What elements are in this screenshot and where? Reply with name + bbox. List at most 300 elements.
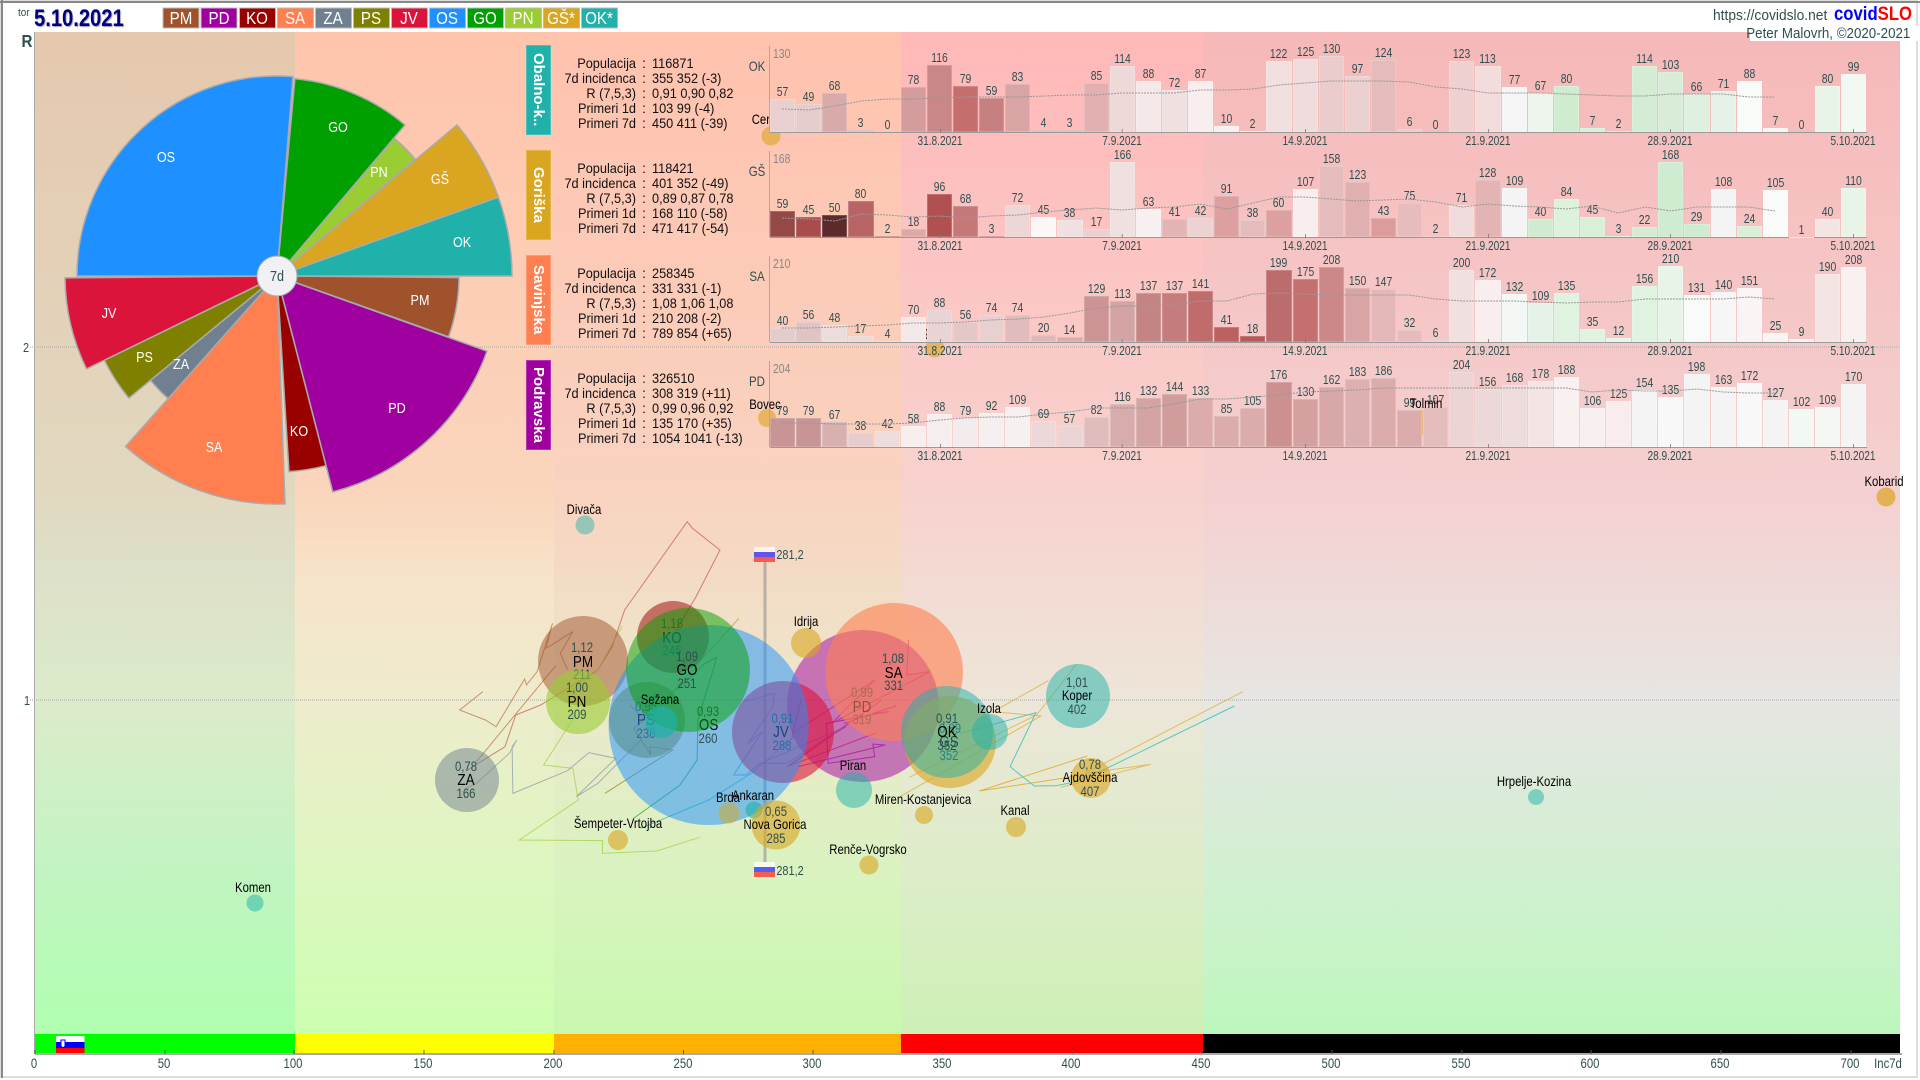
- bar chart: SA: 129: [1087, 281, 1105, 296]
- region bubbles: 166: [457, 786, 476, 801]
- region bubbles: 331: [884, 678, 903, 693]
- bar chart: GŠ: 3: [1616, 221, 1621, 236]
- bar chart: PD: 198: [1688, 359, 1706, 374]
- region plate: [526, 360, 551, 450]
- municipality bubbles: Hrpelje-Kozina: [1497, 774, 1571, 789]
- polar area chart of regions: OK: [453, 233, 472, 250]
- bar chart: OK: 87: [1195, 66, 1206, 81]
- bar chart: PD: 183: [1349, 364, 1366, 379]
- region statistics: :: [642, 54, 646, 70]
- bar chart: GŠ: 21.9.2021: [1465, 238, 1511, 253]
- region plate: Obalno-k..: [530, 53, 547, 127]
- bar chart: SA: 4: [884, 326, 890, 341]
- region statistics: 1054 1041 (-13): [652, 430, 743, 446]
- polar area chart of regions: KO: [290, 422, 308, 439]
- bar chart: GŠ: 158: [1322, 151, 1340, 166]
- bar chart: GŠ: 5.10.2021: [1830, 238, 1876, 253]
- municipality bubbles: Logatec: [910, 324, 950, 339]
- region statistics: :: [642, 280, 646, 296]
- bar chart: OK: 3: [1067, 115, 1073, 130]
- bar chart: PD: 133: [1192, 383, 1209, 398]
- bar chart: SA: 14.9.2021: [1282, 343, 1328, 358]
- bar chart: SA: 137: [1166, 278, 1183, 293]
- region statistics: [564, 160, 733, 236]
- bar chart: PD: 204: [773, 361, 790, 376]
- region bubbles: 319: [853, 712, 872, 727]
- bar chart: SA: 7.9.2021: [1102, 343, 1142, 358]
- bar chart: SA: 210: [773, 256, 790, 271]
- region bubbles: JV: [773, 724, 789, 741]
- bar chart: GŠ: 91: [1221, 181, 1232, 196]
- bar chart: GŠ: 45: [1587, 202, 1598, 217]
- bar chart: OK: 79: [960, 71, 971, 86]
- bar chart: OK: 2: [1616, 116, 1621, 131]
- bar chart: PD: 85: [1221, 401, 1232, 416]
- x axis: 450: [1192, 1056, 1211, 1071]
- x axis: 200: [544, 1056, 563, 1071]
- bar chart: GŠ: [749, 147, 1876, 253]
- municipality bubbles: 407: [1081, 784, 1100, 799]
- bar chart: OK: 5.10.2021: [1830, 133, 1876, 148]
- region bubbles: 0,99: [851, 685, 873, 700]
- bar chart: GŠ: 24: [1743, 211, 1755, 226]
- bar chart: GŠ: 60: [1273, 195, 1285, 210]
- region statistics: :: [642, 190, 646, 206]
- bar chart: GŠ: 96: [934, 179, 945, 194]
- region statistics: :: [642, 370, 646, 386]
- bar chart: SA: 48: [829, 310, 841, 325]
- region plate: Goriška: [530, 167, 547, 223]
- bar chart: SA: 6: [1433, 325, 1439, 340]
- region statistics: :: [642, 414, 646, 430]
- bar chart: GŠ: 40: [1534, 204, 1546, 219]
- bar chart: SA: 31.8.2021: [917, 343, 963, 358]
- bar chart: PD: 58: [907, 411, 919, 426]
- bar chart: OK: 123: [1453, 46, 1470, 61]
- region plate: Podravska: [530, 367, 547, 443]
- x axis: 0: [31, 1056, 37, 1071]
- site link and logo: [1713, 4, 1912, 25]
- bar chart: PD: 42: [881, 416, 893, 431]
- region bubbles: 352: [940, 748, 959, 763]
- bar chart: OK: 99: [1848, 59, 1859, 74]
- region statistics: Populacija: [577, 160, 636, 176]
- bar chart: SA: 17: [855, 321, 867, 336]
- region statistics: R (7,5,3): [586, 400, 636, 416]
- date heading: 5.10.2021: [34, 5, 124, 32]
- region statistics: 0,89 0,87 0,78: [652, 190, 733, 206]
- y axis labels: 2: [23, 340, 29, 355]
- polar area chart of regions: ZA: [173, 355, 190, 372]
- bar chart: OK: 88: [1143, 66, 1154, 81]
- region statistics: :: [642, 84, 646, 100]
- bar chart: OK: 68: [829, 78, 841, 92]
- region statistics: :: [642, 100, 646, 116]
- bar chart: SA: 135: [1558, 278, 1575, 293]
- municipality bubbles: 1,01: [1066, 675, 1088, 690]
- municipality bubbles: Kanal: [1001, 803, 1029, 818]
- region bubbles: [435, 601, 996, 825]
- bar chart: PD: PD: [749, 373, 765, 389]
- x axis: 300: [803, 1056, 822, 1071]
- bar chart: GŠ: 43: [1378, 203, 1389, 218]
- bar chart: GŠ: 59: [777, 196, 788, 211]
- bar chart: OK: 114: [1114, 51, 1130, 66]
- region bubbles: GO: [677, 662, 697, 679]
- bar chart: GŠ: 22: [1639, 212, 1650, 227]
- bar chart: SA: 140: [1714, 277, 1732, 292]
- bar chart: OK: 49: [803, 89, 814, 104]
- bar chart: OK: 57: [777, 84, 788, 99]
- bar chart: OK: 83: [1012, 69, 1023, 84]
- region bubbles: PS: [637, 712, 655, 729]
- region statistics: Populacija: [577, 370, 636, 386]
- bar chart: GŠ: 128: [1479, 165, 1497, 180]
- bar chart: OK: 130: [1322, 41, 1340, 56]
- region statistics: :: [642, 294, 646, 310]
- bar chart: SA: 150: [1349, 273, 1366, 288]
- bar chart: OK: 67: [1534, 78, 1546, 93]
- bar chart: OK: 0: [884, 117, 890, 132]
- bar chart: OK: 122: [1270, 46, 1288, 61]
- region legend chips: ZA: [323, 8, 344, 28]
- bar chart: SA: 113: [1114, 286, 1130, 301]
- region statistics: [564, 264, 733, 341]
- region statistics: 116871: [652, 54, 694, 70]
- region statistics: :: [642, 174, 646, 190]
- region statistics: :: [642, 220, 646, 236]
- municipality bubbles: Kobarid: [1864, 474, 1904, 489]
- bar chart: SA: 9: [1799, 324, 1804, 339]
- region statistics: 0,91 0,90 0,82: [652, 84, 733, 100]
- bar chart: OK: 77: [1508, 72, 1520, 87]
- bar chart: GŠ: 3: [989, 221, 994, 236]
- bar chart: GŠ: 63: [1143, 194, 1154, 209]
- bar chart: GŠ: 166: [1114, 147, 1131, 162]
- region statistics: 789 854 (+65): [652, 324, 732, 340]
- bar chart: SA: 199: [1270, 255, 1288, 270]
- bar chart: OK: 31.8.2021: [917, 133, 963, 148]
- bar chart: GŠ: 41: [1169, 204, 1180, 219]
- municipality bubbles: Divača: [567, 502, 601, 517]
- region statistics: 401 352 (-49): [652, 174, 728, 190]
- region statistics: 308 319 (+11): [652, 384, 731, 400]
- bar chart: GŠ: 17: [1090, 214, 1102, 229]
- region statistics: :: [642, 160, 646, 176]
- region statistics: Primeri 7d: [578, 114, 636, 130]
- icon: Slovenian flag on scale: [56, 1036, 84, 1054]
- bar chart: OK: 97: [1352, 61, 1363, 76]
- bar chart: SA: 28.9.2021: [1647, 343, 1693, 358]
- bar chart: OK: 103: [1662, 57, 1679, 72]
- region statistics: Primeri 7d: [578, 220, 636, 236]
- bar chart: PD: 88: [934, 399, 945, 414]
- bar chart: OK: 14.9.2021: [1282, 133, 1328, 148]
- bar chart: OK: [749, 41, 1876, 148]
- region statistics: :: [642, 384, 646, 400]
- bar chart: PD: 130: [1296, 384, 1314, 399]
- bar chart: OK: 6: [1407, 114, 1412, 129]
- x axis: 250: [674, 1056, 693, 1071]
- region legend chips: GŠ*: [547, 8, 575, 28]
- region statistics: 0,99 0,96 0,92: [652, 400, 733, 416]
- bar chart: OK: 124: [1375, 45, 1392, 60]
- bar chart: OK: 28.9.2021: [1647, 133, 1693, 148]
- bar chart: OK: 7.9.2021: [1102, 133, 1142, 148]
- region statistics: 258345: [652, 264, 695, 280]
- region plate: [526, 255, 551, 345]
- bar chart: SA: 137: [1140, 278, 1157, 293]
- municipality labels over charts: Tolmin: [1410, 396, 1442, 411]
- bar chart: SA: 35: [1587, 314, 1598, 329]
- y axis labels: [22, 31, 32, 708]
- bar chart: GŠ: 45: [1038, 202, 1050, 217]
- x axis: 550: [1452, 1056, 1471, 1071]
- bar chart: GŠ: 18: [907, 214, 919, 229]
- municipality bubbles: Koper: [1062, 688, 1092, 703]
- bar chart: GŠ: 38: [1247, 205, 1259, 220]
- bar chart: OK: 7: [1772, 113, 1778, 128]
- bar chart: SA: 208: [1845, 252, 1862, 267]
- bar chart: GŠ: 109: [1505, 173, 1523, 188]
- bar chart: SA: 208: [1322, 252, 1340, 267]
- y axis labels: 1: [24, 693, 30, 708]
- bar chart: SA: 40: [777, 313, 788, 328]
- bar chart: PD: 172: [1740, 368, 1758, 383]
- bar chart: PD: 69: [1038, 406, 1050, 421]
- region bubbles: 251: [678, 676, 697, 691]
- bar chart: GŠ: 2: [1433, 221, 1439, 236]
- bar chart: PD: 99: [1404, 395, 1415, 410]
- bar chart: SA: 132: [1505, 279, 1523, 294]
- bar chart: PD: 154: [1636, 375, 1653, 390]
- bar chart: SA: 70: [907, 302, 919, 317]
- bar chart: SA: 156: [1636, 271, 1653, 286]
- x axis: 50: [158, 1056, 170, 1071]
- bar chart: PD: 28.9.2021: [1647, 448, 1693, 463]
- site link and logo: covidSLO: [1834, 4, 1912, 25]
- bar chart: OK: 7: [1590, 113, 1595, 128]
- bar chart: PD: 204: [1453, 357, 1470, 372]
- bar chart: OK: 88: [1743, 66, 1755, 81]
- region statistics: 210 208 (-2): [652, 310, 721, 326]
- y axis labels: R: [22, 31, 32, 51]
- bar chart: PD: 170: [1845, 369, 1862, 384]
- municipality bubbles: Šempeter-Vrtojba: [574, 815, 662, 831]
- bar chart: GŠ: 123: [1349, 167, 1366, 182]
- bar chart: PD: 162: [1322, 372, 1340, 387]
- bar chart: SA: 56: [960, 307, 971, 322]
- region statistics: 7d incidenca: [564, 174, 636, 190]
- region bubbles: 260: [699, 731, 718, 746]
- region statistics: :: [642, 204, 646, 220]
- region statistics: 1,08 1,06 1,08: [652, 294, 733, 310]
- bar chart: GŠ: 168: [1662, 147, 1679, 162]
- panel: Goriška: [526, 147, 1876, 253]
- region statistics: 7d incidenca: [564, 70, 636, 86]
- bar chart: SA: 18: [1247, 321, 1259, 336]
- region legend chips: PN: [513, 8, 533, 28]
- bar chart: SA: 172: [1479, 265, 1497, 280]
- bar chart: PD: 31.8.2021: [917, 448, 963, 463]
- region bubbles: 0,78: [455, 759, 477, 774]
- region statistics: R (7,5,3): [586, 84, 636, 100]
- author credit: Peter Malovrh, ©2020-2021: [1746, 26, 1910, 42]
- region statistics: 103 99 (-4): [652, 100, 714, 116]
- bar chart: PD: 5.10.2021: [1830, 448, 1876, 463]
- bar chart: PD: 178: [1532, 366, 1549, 381]
- bar chart: PD: 188: [1558, 362, 1575, 377]
- region statistics: :: [642, 324, 646, 340]
- bar chart: OK: OK: [749, 58, 765, 74]
- bar chart: OK: 72: [1169, 75, 1180, 90]
- region plate: [526, 150, 551, 240]
- region statistics: [564, 370, 743, 446]
- bar chart: GŠ: 31.8.2021: [917, 238, 963, 253]
- x axis: 500: [1322, 1056, 1341, 1071]
- bar chart: SA: 12: [1613, 323, 1624, 338]
- region bubbles: OK: [937, 724, 957, 741]
- region statistics: 168 110 (-58): [652, 204, 728, 220]
- polar area chart of regions: [64, 75, 513, 505]
- region statistics: 326510: [652, 370, 695, 386]
- bar chart: OK: 59: [986, 83, 997, 98]
- bar chart: GŠ: 75: [1404, 188, 1415, 203]
- bar chart: PD: 168: [1505, 370, 1523, 385]
- bar chart: PD: 67: [829, 407, 841, 422]
- region statistics: Primeri 1d: [578, 414, 636, 430]
- bar chart: PD: 186: [1375, 363, 1392, 378]
- region statistics: :: [642, 400, 646, 416]
- bar chart: GŠ: 42: [1195, 203, 1206, 218]
- region statistics: Primeri 1d: [578, 204, 636, 220]
- polar area chart of regions: PM: [411, 291, 429, 308]
- region bubbles: PD: [853, 699, 871, 716]
- bar chart: PD: 79: [803, 403, 814, 418]
- municipality bubbles: 0,65: [765, 804, 787, 819]
- municipality bubbles: Miren-Kostanjevica: [875, 792, 971, 807]
- bar chart: SA: 88: [934, 295, 945, 310]
- region bubbles: 1,00: [566, 680, 588, 695]
- panel: Podravska: [526, 357, 1876, 463]
- bar chart: SA: 141: [1192, 276, 1209, 291]
- region legend chips: PM: [170, 8, 192, 28]
- municipality bubbles: Ajdovščina: [1063, 770, 1117, 785]
- bar chart: PD: 156: [1479, 374, 1497, 389]
- region statistics: :: [642, 310, 646, 326]
- bar chart: SA: 5.10.2021: [1830, 343, 1876, 358]
- bar chart: OK: 66: [1691, 79, 1703, 94]
- bar chart: SA: 200: [1453, 255, 1470, 270]
- polar area chart of regions: GŠ: [431, 170, 449, 187]
- bar chart: OK: 10: [1221, 111, 1232, 126]
- bar chart: GŠ: 28.9.2021: [1647, 238, 1693, 253]
- region statistics: Primeri 1d: [578, 100, 636, 116]
- region statistics: R (7,5,3): [586, 190, 636, 206]
- bar chart: SA: 41: [1221, 312, 1232, 327]
- polar area chart of regions: SA: [206, 438, 223, 455]
- bar chart: PD: 176: [1270, 367, 1288, 382]
- polar area chart of regions: OS: [157, 148, 175, 165]
- bar chart: GŠ: 72: [1012, 190, 1023, 205]
- region statistics: Primeri 7d: [578, 430, 636, 446]
- bar chart: GŠ: 38: [1064, 205, 1076, 220]
- region statistics: 118421: [652, 160, 694, 176]
- region statistics: Populacija: [577, 54, 636, 70]
- region statistics: 450 411 (-39): [652, 114, 728, 130]
- bar chart: GŠ: 105: [1767, 175, 1784, 190]
- panel: Obalno-kraška: [526, 41, 1876, 148]
- x axis: 700: [1841, 1056, 1860, 1071]
- bar chart: OK: 71: [1717, 76, 1729, 91]
- bar chart: PD: 105: [1244, 393, 1261, 408]
- bar chart: PD: 79: [960, 403, 971, 418]
- bar chart: GŠ: 7.9.2021: [1102, 238, 1142, 253]
- region bubbles: 0,95: [635, 699, 657, 714]
- region statistics: :: [642, 70, 646, 86]
- region bubbles: SA: [885, 665, 903, 682]
- x axis: [31, 1050, 1902, 1071]
- x axis: 400: [1062, 1056, 1081, 1071]
- bar chart: GŠ: 108: [1714, 174, 1732, 189]
- bar chart: SA: 151: [1740, 273, 1758, 288]
- municipality bubbles: Renče-Vogrsko: [829, 842, 907, 857]
- region statistics: 355 352 (-3): [652, 70, 721, 86]
- bar chart: SA: 190: [1819, 259, 1836, 274]
- bar chart: SA: 20: [1038, 320, 1050, 335]
- bar chart: SA: [749, 251, 1876, 358]
- bar chart: PD: 106: [1584, 393, 1601, 408]
- region bubbles: 1,09: [676, 649, 698, 664]
- site link and logo: https://covidslo.net: [1713, 7, 1827, 24]
- region legend chips: JV: [400, 8, 418, 28]
- bar chart: GŠ: 14.9.2021: [1282, 238, 1328, 253]
- bar chart: PD: 57: [1064, 411, 1076, 426]
- bar chart: GŠ: 110: [1845, 173, 1862, 188]
- region bubbles: 1,12: [571, 640, 593, 655]
- municipality bubbles: Ankaran: [732, 788, 774, 803]
- bar chart: SA: 14: [1064, 322, 1076, 337]
- bar chart: SA: 131: [1688, 280, 1706, 295]
- municipality labels over charts: Bovec: [749, 397, 781, 412]
- bar chart: SA: 74: [1012, 300, 1023, 315]
- bar chart: SA: 147: [1375, 274, 1392, 289]
- x axis: 650: [1711, 1056, 1730, 1071]
- region bubbles: 246: [663, 643, 682, 658]
- bar chart: PD: 21.9.2021: [1465, 448, 1511, 463]
- region statistics: :: [642, 264, 646, 280]
- bar chart: PD: 163: [1714, 372, 1732, 387]
- region bubbles: GŠ: [939, 733, 959, 751]
- region bubbles: KO: [662, 630, 682, 647]
- bar chart: OK: 114: [1636, 51, 1653, 66]
- bar chart: PD: 107: [1427, 392, 1444, 407]
- polar area chart of regions: JV: [102, 304, 117, 321]
- polar area chart of regions: PD: [388, 399, 406, 416]
- bar chart: OK: 113: [1480, 51, 1496, 66]
- bar chart: PD: 38: [855, 418, 867, 433]
- bar chart: OK: 0: [1433, 117, 1439, 132]
- region legend chips: PD: [209, 8, 229, 28]
- bar chart: GŠ: 45: [803, 202, 814, 217]
- bar chart: OK: 3: [858, 115, 864, 130]
- bar chart: PD: 79: [777, 403, 788, 418]
- bar chart: PD: 125: [1610, 386, 1627, 401]
- bar chart: GŠ: 1: [1799, 222, 1804, 237]
- bar chart: OK: 2: [1250, 116, 1256, 131]
- region bubbles: 352: [938, 738, 957, 753]
- x axis: Inc7d: [1874, 1056, 1902, 1071]
